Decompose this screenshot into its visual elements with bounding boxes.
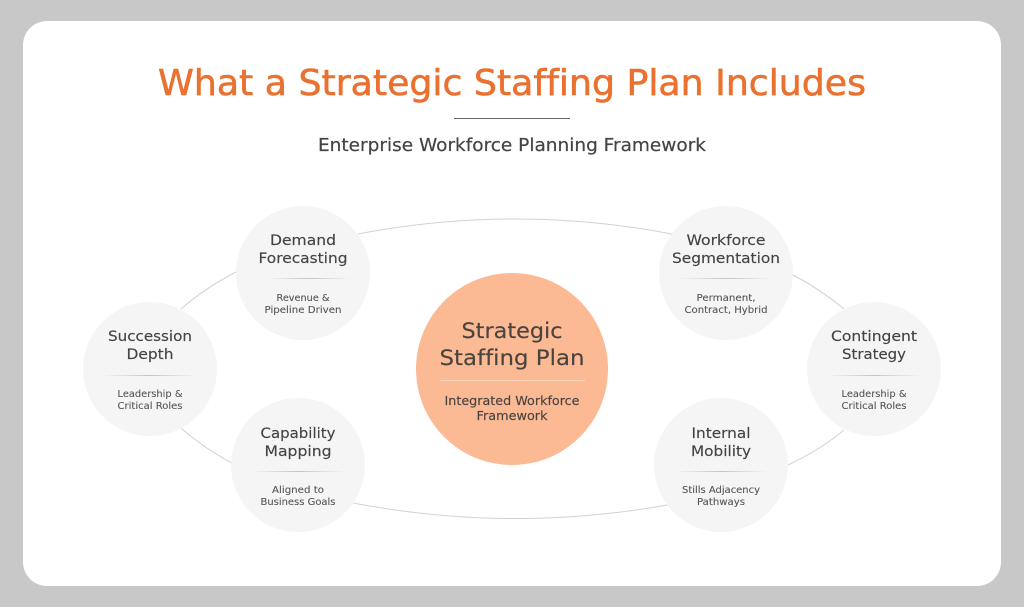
node: Succession Depth: [83, 302, 217, 436]
node: Workforce Segmentation: Contract, Hybrid: [684, 305, 768, 316]
node: Contingent Strategy: Contingent: [831, 329, 917, 345]
center node: Strategic Staffing Plan: [416, 273, 608, 465]
node: Capability Mapping: [231, 398, 365, 532]
node: Internal Mobility: Internal: [692, 426, 750, 442]
node: Internal Mobility: [654, 398, 788, 532]
center node: Strategic Staffing Plan: Strategic: [462, 319, 562, 344]
node: Workforce Segmentation: Permanent,: [696, 293, 756, 304]
node: Succession Depth: Critical Roles: [118, 401, 183, 412]
center node: Strategic Staffing Plan: Framework: [476, 408, 548, 423]
node: Internal Mobility: Stills Adjacency: [682, 485, 760, 496]
node: Contingent Strategy: Critical Roles: [842, 401, 907, 412]
subtitle: Enterprise Workforce Planning Framework: [318, 135, 707, 156]
connecting arcs: [181, 219, 844, 519]
node: Contingent Strategy: Leadership &: [842, 389, 907, 400]
center node: Strategic Staffing Plan: Integrated Workforce: [444, 393, 580, 408]
node: Succession Depth: Succession: [108, 329, 192, 345]
node: Capability Mapping: Business Goals: [260, 497, 336, 508]
node: Demand Forecasting: Revenue &: [276, 293, 330, 304]
title: What a Strategic Staffing Plan Includes: [158, 63, 866, 104]
node: Contingent Strategy: Strategy: [842, 347, 906, 363]
node: Demand Forecasting: Demand: [270, 233, 336, 249]
node: Demand Forecasting: Forecasting: [258, 251, 348, 267]
node: Capability Mapping: Mapping: [264, 444, 332, 460]
node: Workforce Segmentation: [659, 206, 793, 340]
node: Capability Mapping: Capability: [260, 426, 336, 442]
center node: Strategic Staffing Plan: Staffing Plan: [440, 346, 584, 371]
node: Demand Forecasting: [236, 206, 370, 340]
node: Succession Depth: Depth: [126, 347, 174, 363]
node: Capability Mapping: Aligned to: [272, 485, 324, 496]
node: Internal Mobility: Pathways: [697, 497, 745, 508]
node: Internal Mobility: Mobility: [691, 444, 751, 460]
node: Succession Depth: Leadership &: [118, 389, 183, 400]
node: Workforce Segmentation: Segmentation: [672, 251, 780, 267]
node: Contingent Strategy: [807, 302, 941, 436]
node: Demand Forecasting: Pipeline Driven: [264, 305, 342, 316]
node: Workforce Segmentation: Workforce: [686, 233, 766, 249]
